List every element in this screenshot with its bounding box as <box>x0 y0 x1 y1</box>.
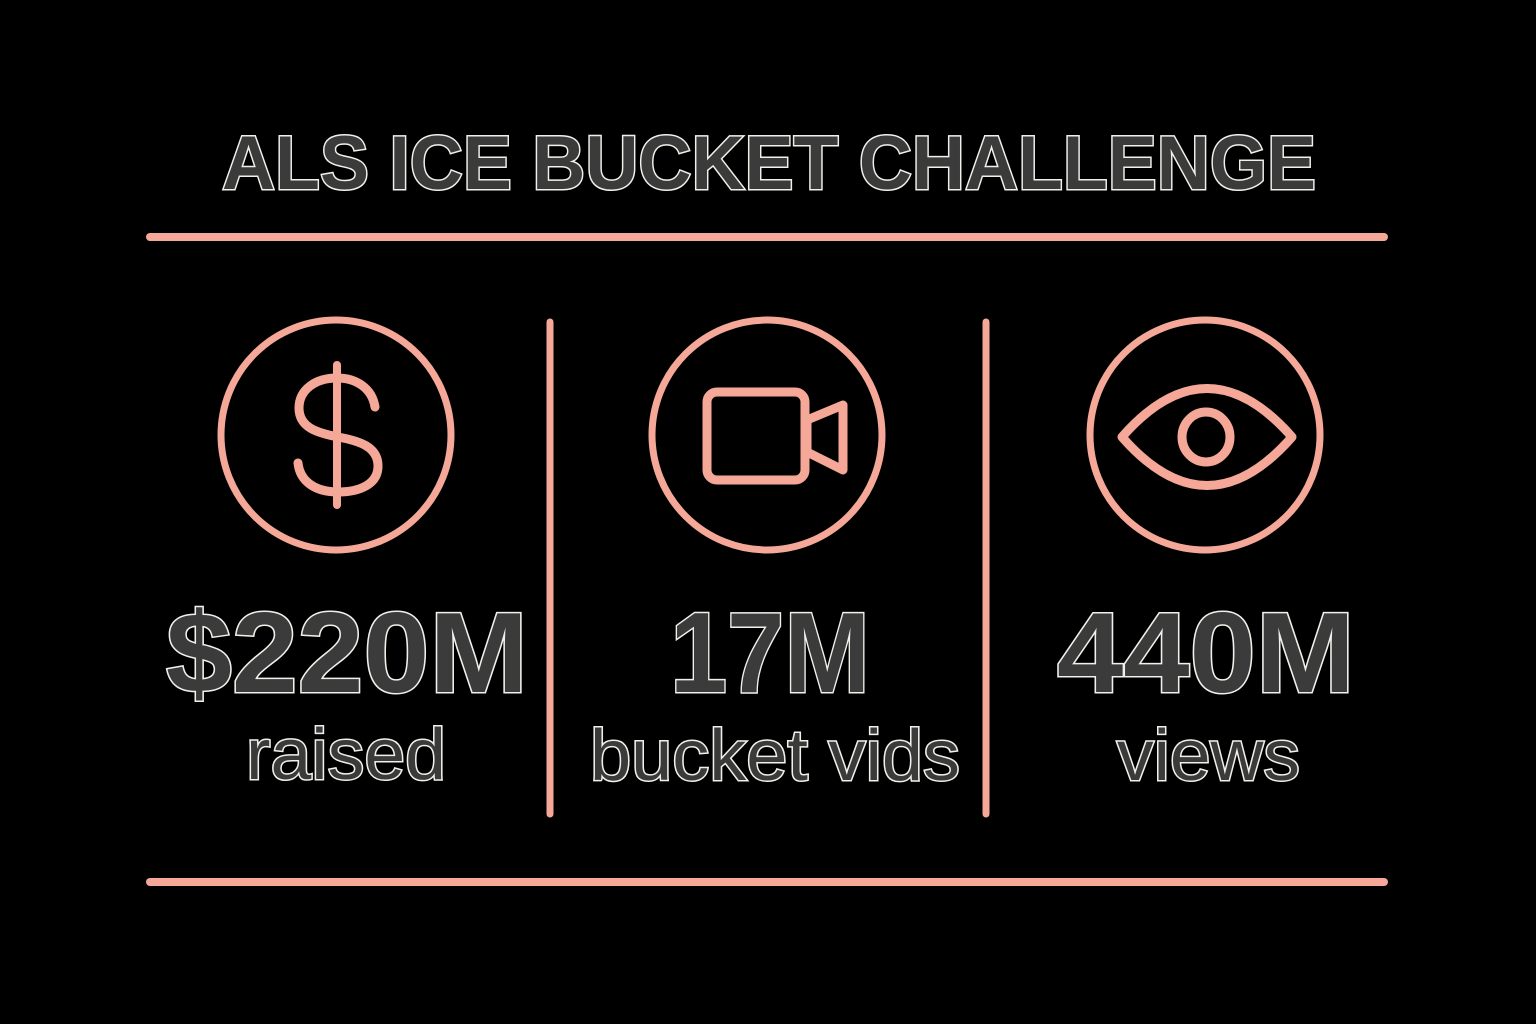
panel: bucket vids <box>590 320 960 796</box>
number: 440M: 440M <box>1057 590 1355 717</box>
number: $220M: $220M <box>166 590 528 717</box>
title: ALS ICE BUCKET CHALLENGE <box>222 121 1316 206</box>
label: bucket vids: bucket vids <box>590 716 960 796</box>
panel: raised <box>166 320 528 795</box>
icon: dollar <box>221 320 451 550</box>
label: raised: raised <box>246 715 446 795</box>
icon: eye <box>1090 320 1320 550</box>
panel: views <box>1057 320 1355 796</box>
icon: video camera <box>652 320 882 550</box>
number: 17M: 17M <box>670 590 870 717</box>
label: views: views <box>1117 716 1300 796</box>
